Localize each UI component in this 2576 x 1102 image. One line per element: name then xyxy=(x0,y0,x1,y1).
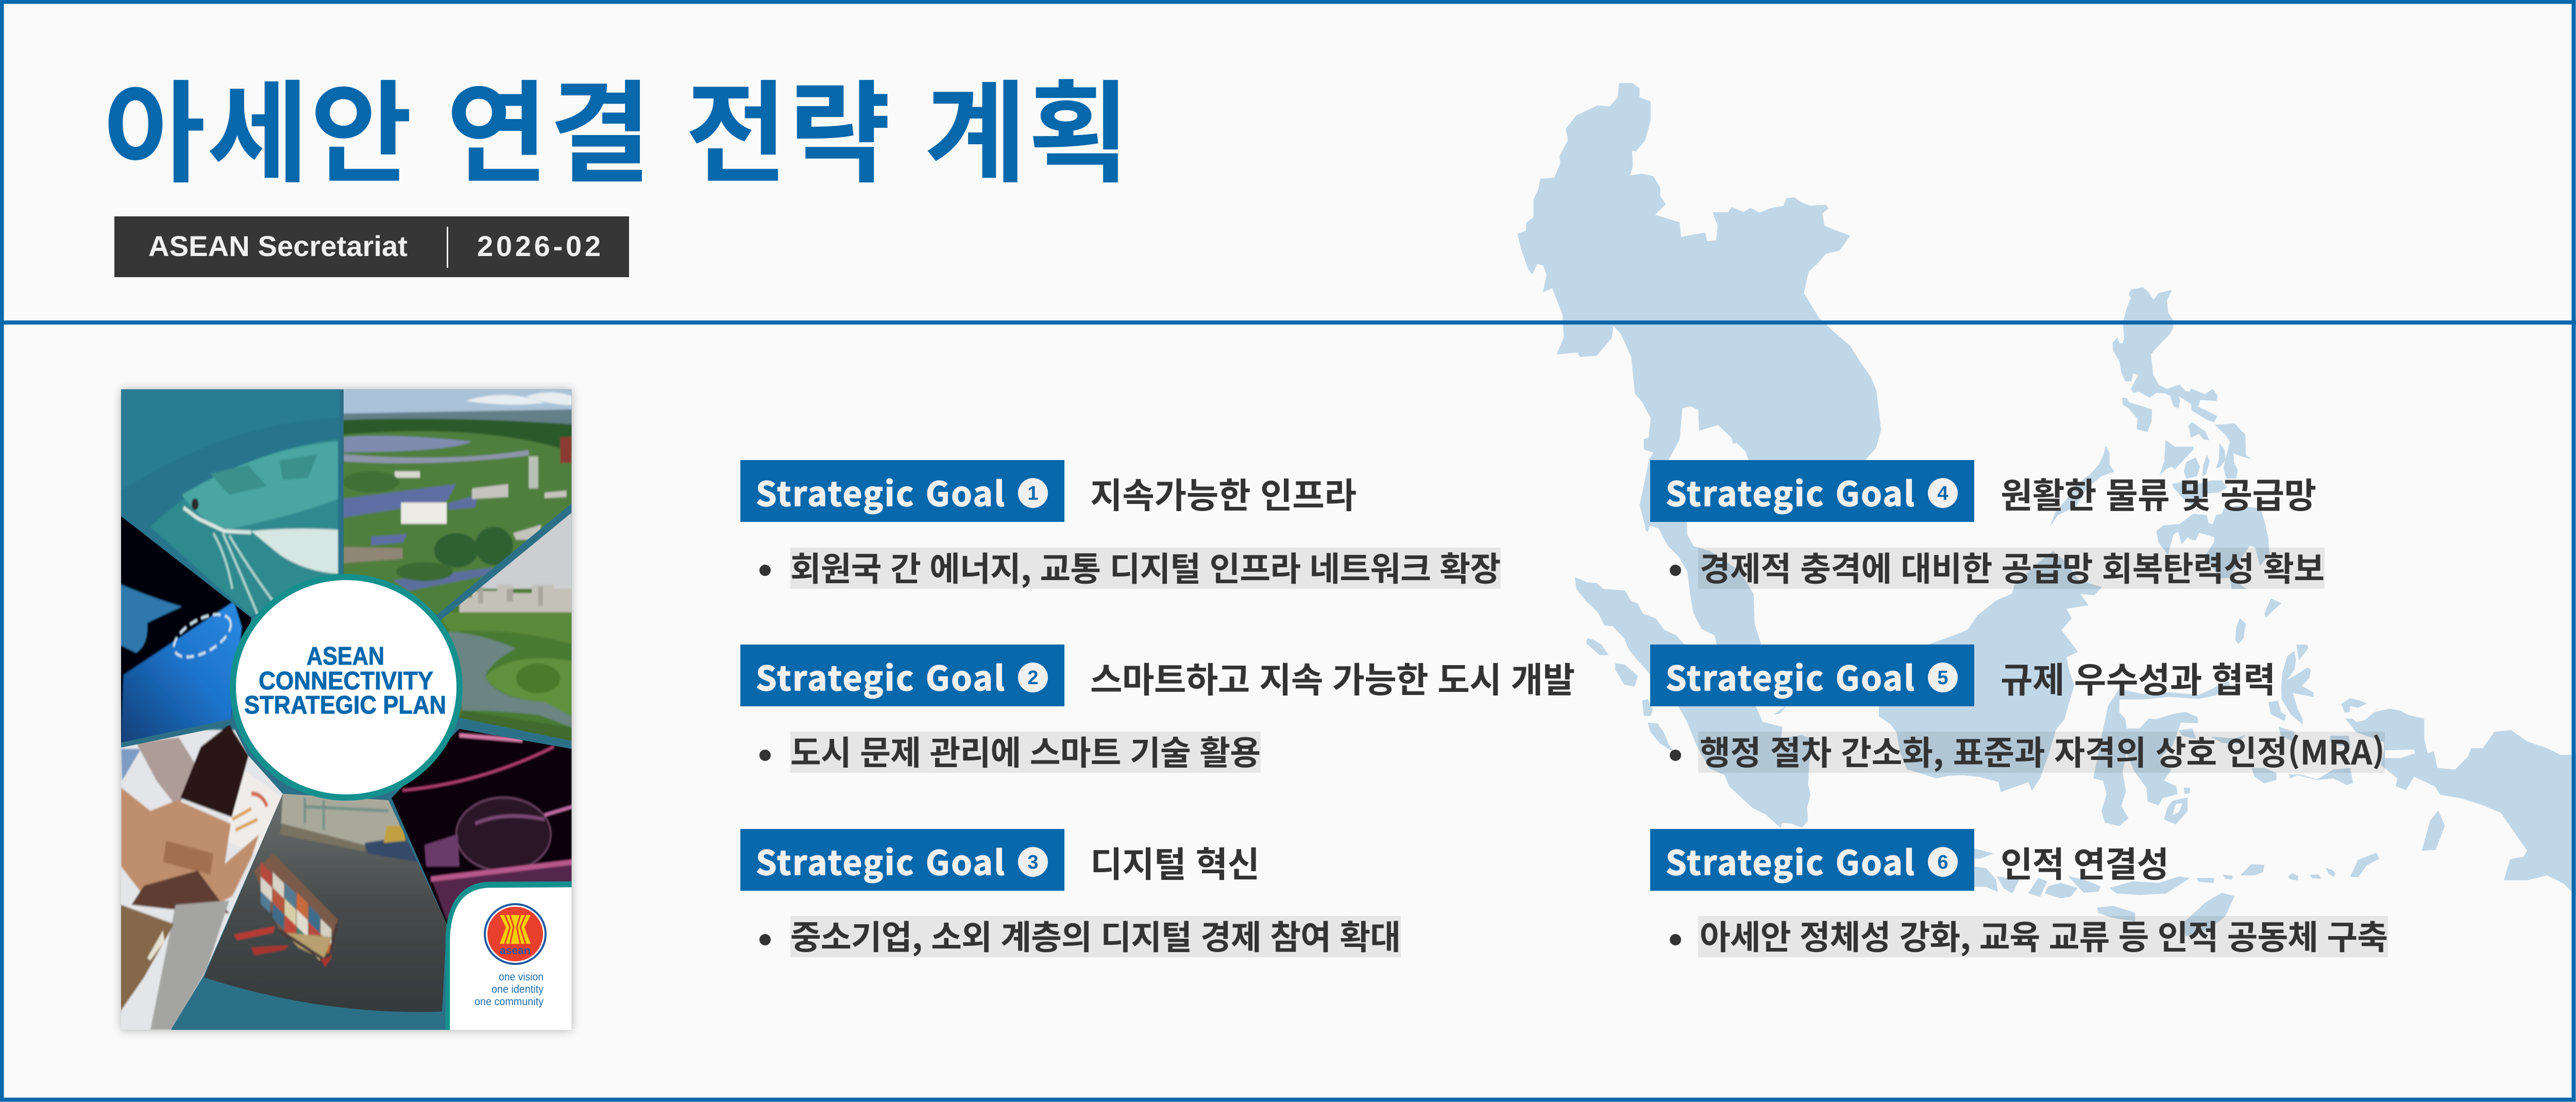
goal 2 badge: 2 xyxy=(1027,667,1039,689)
cover photo: light bulb xyxy=(387,725,576,930)
cover title xyxy=(244,642,446,719)
goal 1 badge xyxy=(740,460,1064,522)
cover tagline xyxy=(474,971,544,1008)
goal 4 xyxy=(1650,460,2325,590)
goal 4 badge xyxy=(1650,460,1974,522)
cover photo: city lake xyxy=(440,513,572,741)
map: Malay peninsula and Sumatra xyxy=(1575,505,2061,898)
goal 2 badge xyxy=(740,645,1064,706)
goal 2 badge: Strategic Goal xyxy=(756,652,1005,700)
goal 3 bullet: 중소기업, 소외 계층의 디지털 경제 참여 확대 xyxy=(790,910,1401,959)
cover title: STRATEGIC PLAN xyxy=(244,691,446,719)
goal 4 bullet: 경제적 충격에 대비한 공급망 회복탄력성 확보 xyxy=(1700,542,2325,590)
goal 6 heading: 인적 연결성 xyxy=(2001,836,2169,887)
goal 5 bullet: 행정 절차 간소화, 표준과 자격의 상호 인정(MRA) xyxy=(1700,726,2385,774)
map: Borneo xyxy=(1879,552,2101,791)
map: mainland Southeast Asia xyxy=(1518,83,1880,531)
goal 4 badge: 4 xyxy=(1937,483,1948,504)
goal 6 bullet: 아세안 정체성 강화, 교육 교류 등 인적 공동체 구축 xyxy=(1700,910,2388,959)
goal 2 xyxy=(740,645,1575,774)
goal 5 badge: 5 xyxy=(1937,667,1948,689)
goal 5 badge xyxy=(1650,645,1974,706)
cover centre circle xyxy=(233,577,460,798)
report cover shadow xyxy=(121,389,572,1030)
goal 6 xyxy=(1650,829,2388,959)
cover photo: tablet and finger xyxy=(115,512,255,747)
goal 1 badge: 1 xyxy=(1027,483,1039,504)
goal 3 heading: 디지털 혁신 xyxy=(1090,836,1260,887)
header divider line xyxy=(0,320,2576,325)
ASEAN logo: asean xyxy=(500,945,531,957)
goal 1 heading: 지속가능한 인프라 xyxy=(1090,467,1357,518)
cover photo: container ship at port xyxy=(201,789,450,1020)
source and date pill: 2026-02 xyxy=(477,230,601,262)
cover tagline: one community xyxy=(474,996,544,1008)
goal 3 xyxy=(740,829,1401,959)
ASEAN logo xyxy=(484,903,547,965)
goal 6 badge: Strategic Goal xyxy=(1666,836,1914,885)
cover photo: solar farm xyxy=(340,384,576,619)
source and date pill xyxy=(114,216,629,277)
goal 2 heading: 스마트하고 지속 가능한 도시 개발 xyxy=(1090,652,1575,703)
goal 1 bullet: 회원국 간 에너지, 교통 디지털 인프라 네트워크 확장 xyxy=(790,542,1501,590)
goal 1 badge: Strategic Goal xyxy=(756,467,1005,516)
cover title: CONNECTIVITY xyxy=(259,667,433,695)
map: eastern Indonesia and Papua xyxy=(2061,599,2576,936)
goal 5 heading: 규제 우수성과 협력 xyxy=(2001,652,2276,703)
goal 6 badge xyxy=(1650,829,1974,891)
goal 1 xyxy=(740,460,1501,590)
cover photo: ocean xyxy=(115,384,346,623)
goal 4 heading: 원활한 물류 및 공급망 xyxy=(2001,467,2316,518)
cover photo: hands together xyxy=(115,724,286,1033)
goal 5 badge: Strategic Goal xyxy=(1666,652,1914,700)
map of Southeast Asia xyxy=(1518,83,2576,936)
goal 6 badge: 6 xyxy=(1937,852,1948,873)
source and date pill: ASEAN Secretariat xyxy=(148,230,408,262)
goal 2 bullet: 도시 문제 관리에 스마트 기술 활용 xyxy=(790,726,1261,774)
report cover xyxy=(115,384,576,1037)
goal 3 badge: 3 xyxy=(1027,852,1039,873)
goal 3 badge xyxy=(740,829,1064,891)
map: Philippines xyxy=(2050,287,2269,589)
goal 3 badge: Strategic Goal xyxy=(756,836,1005,885)
cover logo card xyxy=(448,884,576,1037)
goal 4 badge: Strategic Goal xyxy=(1666,467,1914,516)
cover tagline: one identity xyxy=(492,984,544,995)
cover tagline: one vision xyxy=(499,971,544,983)
title: 아세안 연결 전략 계획 xyxy=(104,44,1130,205)
goal 5 xyxy=(1650,645,2385,774)
cover title: ASEAN xyxy=(307,642,384,670)
